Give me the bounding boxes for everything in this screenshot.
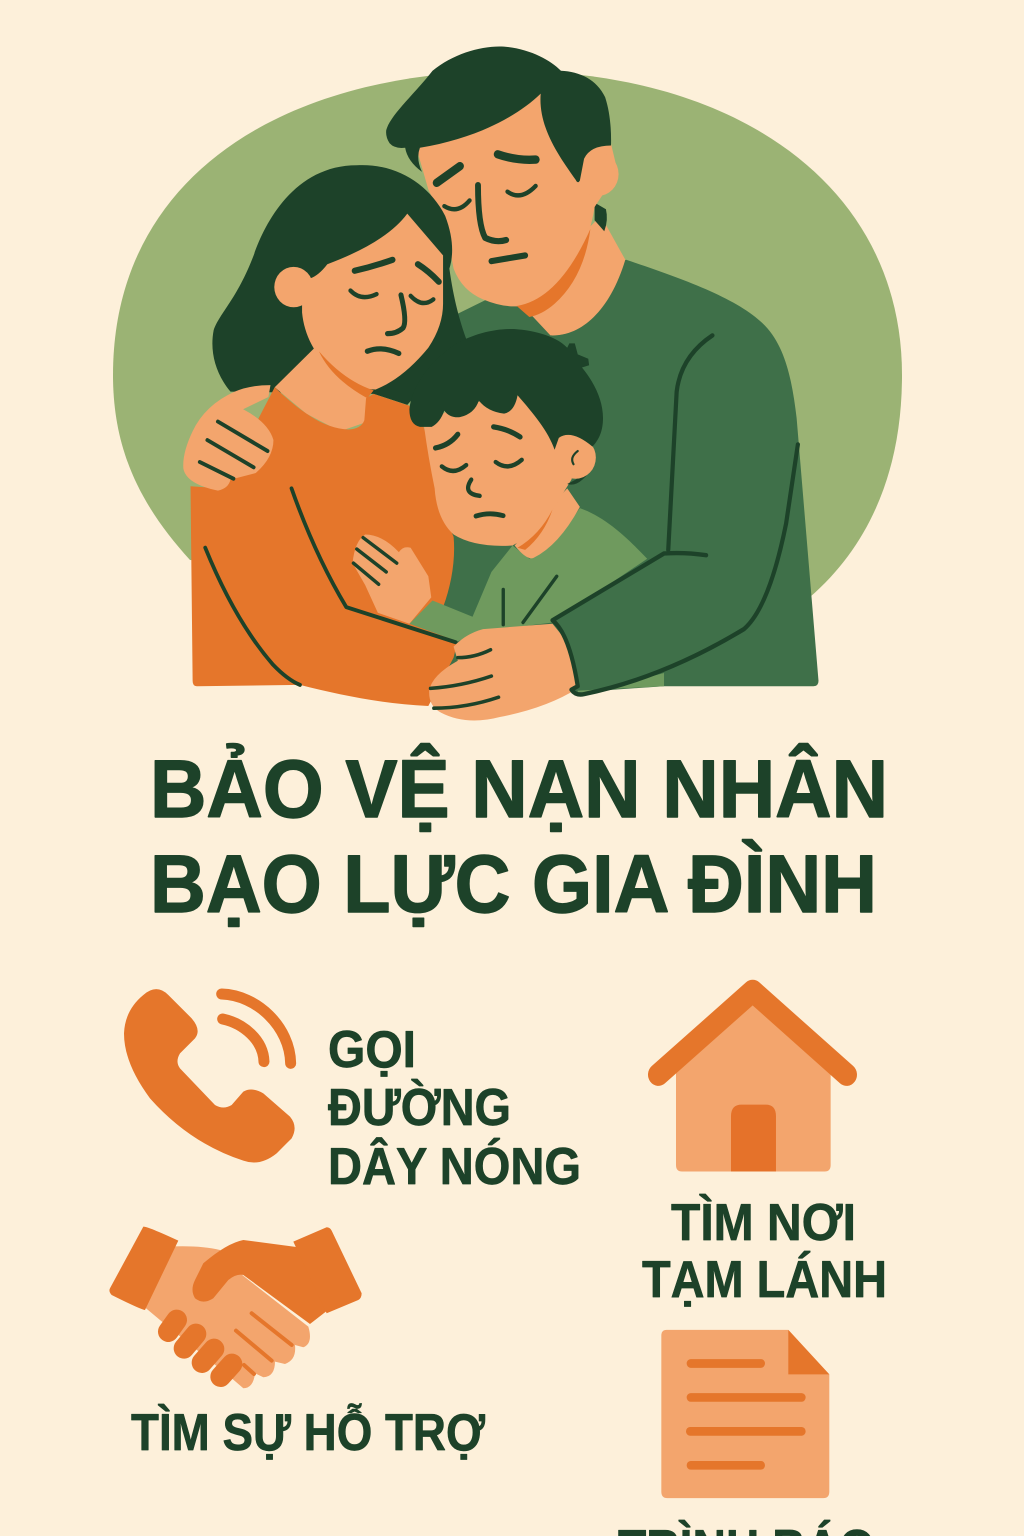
father <box>386 46 819 696</box>
child <box>409 329 647 641</box>
label: seek support: TÌM SỰ HỖ TRỢ <box>131 1403 486 1462</box>
green background blob <box>113 71 902 597</box>
label: find shelter: TÌM NƠI <box>671 1194 856 1252</box>
mother's arm outlines <box>205 488 456 685</box>
illustration: family embracing <box>183 46 819 721</box>
father's hand <box>429 624 578 721</box>
label: call hotline <box>328 1021 581 1196</box>
label: call hotline: DÂY NÓNG <box>328 1137 581 1196</box>
icon: handshake <box>109 1227 362 1388</box>
label: call hotline: ĐƯỜNG <box>328 1079 511 1137</box>
label: call hotline: GỌI <box>328 1021 416 1079</box>
icon: house <box>658 991 847 1171</box>
child's hand <box>353 535 431 624</box>
title <box>150 744 888 930</box>
father's hand on mother's shoulder <box>183 385 273 491</box>
icon: document <box>661 1330 829 1498</box>
label: find shelter: TẠM LÁNH <box>642 1251 887 1309</box>
father's sleeve outlines <box>552 335 798 695</box>
title line 1: BẢO VỆ NẠN NHÂN <box>150 744 888 835</box>
label: find shelter <box>642 1194 887 1309</box>
title line 2: BẠO LỰC GIA ĐÌNH <box>150 839 877 930</box>
icon: telephone <box>124 989 295 1163</box>
mother <box>191 165 466 706</box>
